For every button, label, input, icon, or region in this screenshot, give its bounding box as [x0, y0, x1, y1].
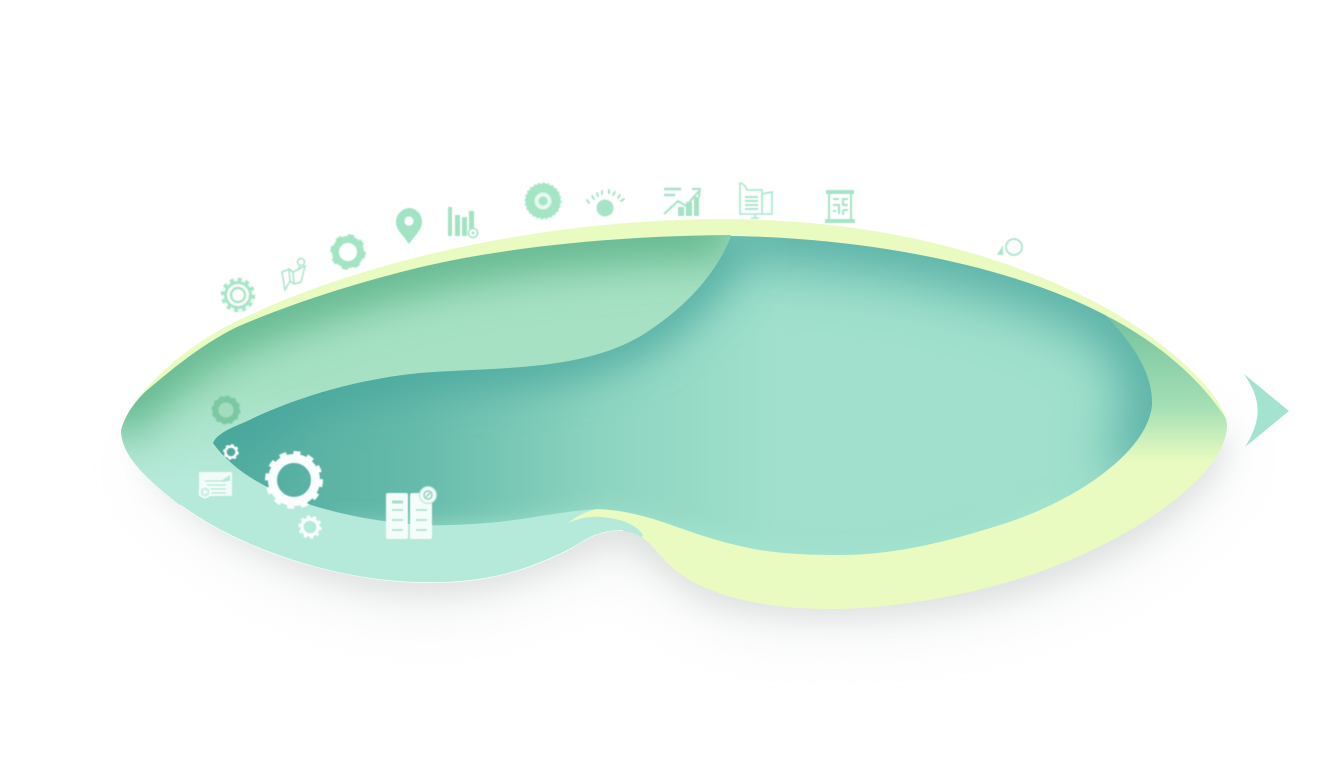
icon: chart card with play badge	[199, 472, 232, 498]
outer lime layer	[121, 219, 1227, 609]
drop shadow under shape	[140, 400, 1232, 617]
icon: bar chart with badge	[448, 207, 478, 238]
icon: document with table	[740, 183, 772, 218]
arrow: right pointer	[1244, 374, 1289, 447]
infographic canvas	[121, 182, 1289, 636]
icon: gauge dot with ticks	[587, 190, 624, 216]
icon: open book with badge	[386, 486, 436, 539]
icon: green gear inside shape	[213, 397, 239, 423]
right green crescent	[1105, 315, 1227, 477]
icon: location pin	[396, 208, 422, 244]
wide soft shadow under shape	[140, 400, 1235, 631]
icon: small circle with sail	[997, 239, 1022, 255]
icon: small white gear lower	[300, 516, 320, 538]
icon: outlined gear	[222, 280, 254, 310]
icon: large white gear	[268, 454, 320, 506]
icon: trend chart	[664, 189, 700, 216]
icon: map with marker	[282, 258, 305, 290]
icon: disc gear	[525, 183, 561, 219]
main leaf shape	[90, 219, 1240, 610]
left green and mint region	[121, 235, 731, 583]
icon: small white gear	[224, 445, 238, 459]
icon: solid gear	[332, 236, 364, 268]
white edge of mint region	[180, 505, 623, 583]
central teal pool	[200, 225, 1170, 568]
icon: blueprint scroll	[825, 190, 855, 223]
